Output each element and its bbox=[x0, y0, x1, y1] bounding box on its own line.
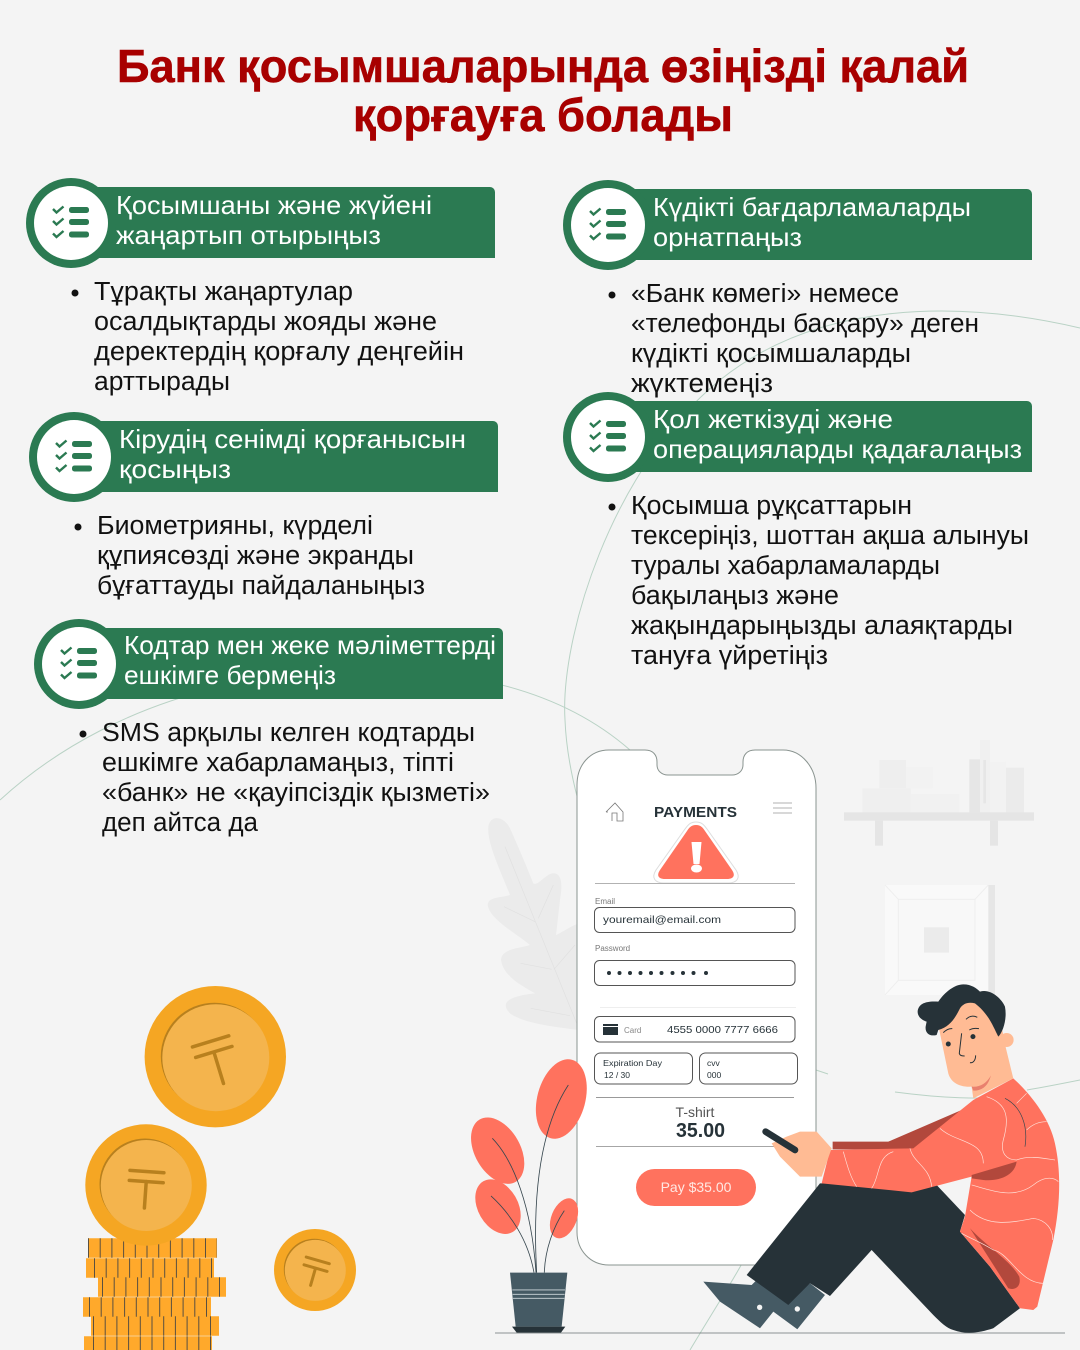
expiration field: Expiration Day bbox=[603, 1058, 663, 1068]
coin: small tenge bbox=[274, 1229, 356, 1311]
panel: secure login bbox=[29, 412, 498, 600]
bullet text: Тұрақты жаңартулар bbox=[94, 278, 353, 306]
heading bbox=[653, 404, 1022, 464]
decorative thin curves bbox=[0, 311, 1080, 1350]
password field bbox=[594, 944, 795, 986]
title: Банк қосымшаларында өзіңізді қалай bbox=[117, 40, 969, 92]
panel: suspicious programs bbox=[563, 180, 1032, 398]
person bbox=[703, 984, 1059, 1333]
cvv field: cvv bbox=[707, 1058, 720, 1068]
icon: menu bbox=[773, 803, 792, 813]
icon: checklist bbox=[29, 412, 119, 502]
shoes bbox=[703, 1280, 825, 1329]
bullet text: SMS арқылы келген кодтарды bbox=[102, 719, 475, 747]
heading: қосыңыз bbox=[119, 454, 231, 484]
heading: Кірудің сенімді қорғанысын bbox=[119, 424, 466, 454]
header bar bbox=[98, 628, 503, 699]
heading: Кодтар мен жеке мәліметтерді bbox=[124, 630, 496, 660]
heading bbox=[653, 192, 971, 252]
heading bbox=[119, 424, 466, 484]
bullet text: Биометрияны, күрделі bbox=[97, 512, 373, 540]
cvv field bbox=[700, 1053, 798, 1084]
bullet text: тануға үйретіңіз bbox=[631, 642, 828, 670]
icon: checklist bbox=[563, 180, 653, 270]
bullet text bbox=[80, 719, 490, 837]
heading: ешкімге бермеңіз bbox=[124, 660, 336, 690]
bullet text: «телефонды басқару» деген bbox=[631, 310, 979, 338]
phone bbox=[577, 750, 816, 1265]
sweater shadows bbox=[970, 1162, 1020, 1289]
header bar bbox=[627, 401, 1032, 472]
background grey leaf bbox=[488, 818, 578, 1030]
icon: home bbox=[606, 803, 623, 821]
bullet text: деп айтса да bbox=[102, 809, 259, 837]
coin: medium tenge bbox=[85, 1124, 207, 1246]
email field bbox=[594, 897, 795, 932]
bullet text bbox=[608, 492, 1029, 670]
bullet text: осалдықтарды жояды және bbox=[94, 308, 437, 336]
panel: update app and system bbox=[26, 178, 495, 396]
panel: access and operations bbox=[563, 392, 1032, 670]
heading: жаңартып отырыңыз bbox=[116, 220, 381, 250]
bullet text: жақындарыңызды алаяқтарды bbox=[631, 612, 1013, 640]
background picture frame bbox=[885, 885, 995, 995]
bullet text: деректердің қорғалу деңгейін bbox=[94, 338, 464, 366]
heading: payments: PAYMENTS bbox=[654, 804, 737, 821]
email field: youremail@email.com bbox=[603, 914, 721, 926]
bullet text: Қосымша рұқсаттарын bbox=[631, 492, 912, 520]
ground line bbox=[495, 1332, 1065, 1334]
header bar bbox=[627, 189, 1032, 260]
email field: Email bbox=[595, 897, 615, 906]
panel: do not share codes bbox=[34, 619, 503, 837]
coin: large tenge bbox=[145, 986, 286, 1127]
bullet text bbox=[74, 512, 425, 600]
card field: 4555 0000 7777 6666 bbox=[667, 1024, 778, 1036]
bullet text: құпиясөзді және экранды bbox=[97, 542, 414, 570]
heading: Күдікті бағдарламаларды bbox=[653, 192, 971, 222]
sweater pattern bbox=[843, 1093, 1058, 1283]
icon: checklist bbox=[34, 619, 124, 709]
expiration field: 12 / 30 bbox=[604, 1070, 630, 1080]
item name and price: 35.00 bbox=[676, 1120, 725, 1142]
bullet text: тексеріңіз, шоттан ақша алынуы bbox=[631, 522, 1029, 550]
header bar bbox=[93, 421, 498, 492]
bullet text: бұғаттауды пайдаланыңыз bbox=[97, 572, 425, 600]
phone body bbox=[577, 750, 816, 1265]
smartphone in hand bbox=[766, 1132, 795, 1150]
icon: warning triangle bbox=[654, 822, 738, 883]
bullet text bbox=[608, 280, 979, 398]
head bbox=[918, 984, 1014, 1098]
sweater bbox=[822, 1078, 1059, 1310]
bullet text: туралы хабарламаларды bbox=[631, 552, 940, 580]
title: қорғауға болады bbox=[353, 89, 733, 141]
card field: Card bbox=[624, 1026, 641, 1035]
icon: checklist bbox=[26, 178, 116, 268]
heading: Қосымшаны және жүйені bbox=[116, 190, 432, 220]
dark inner sleeve bbox=[833, 1110, 962, 1149]
header bar bbox=[90, 187, 495, 258]
bullet text: күдікті қосымшаларды bbox=[631, 340, 911, 368]
pay button: Pay $35.00 bbox=[661, 1179, 732, 1195]
coins stack bbox=[83, 1248, 226, 1346]
plant bbox=[460, 1054, 595, 1333]
heading bbox=[116, 190, 432, 250]
heading bbox=[124, 630, 496, 690]
expiration field bbox=[594, 1053, 692, 1084]
bullet text: бақылаңыз және bbox=[631, 582, 839, 610]
bullet text: «банк» не «қауіпсіздік қызметі» bbox=[102, 779, 490, 807]
hand bbox=[772, 1132, 832, 1177]
item name and price: T-shirt bbox=[676, 1104, 715, 1120]
bullet text: жүктемеңіз bbox=[631, 370, 773, 398]
bullet text bbox=[72, 278, 464, 396]
heading: операцияларды қадағалаңыз bbox=[653, 434, 1022, 464]
pay button bbox=[636, 1169, 756, 1206]
trousers bbox=[747, 1183, 1020, 1333]
item name and price bbox=[676, 1104, 725, 1142]
heading: орнатпаңыз bbox=[653, 222, 802, 252]
card field bbox=[594, 1016, 795, 1042]
cvv field: 000 bbox=[707, 1070, 721, 1080]
bullet text: ешкімге хабарламаңыз, тіпті bbox=[102, 749, 454, 777]
bullet text: «Банк көмегі» немесе bbox=[631, 280, 899, 308]
icon: checklist bbox=[563, 392, 653, 482]
password field: Password bbox=[595, 944, 630, 953]
title bbox=[117, 40, 969, 141]
divider bbox=[595, 882, 795, 884]
background shelf bbox=[844, 740, 1034, 846]
bullet text: арттырады bbox=[94, 368, 230, 396]
heading: Қол жеткізуді және bbox=[653, 404, 893, 434]
